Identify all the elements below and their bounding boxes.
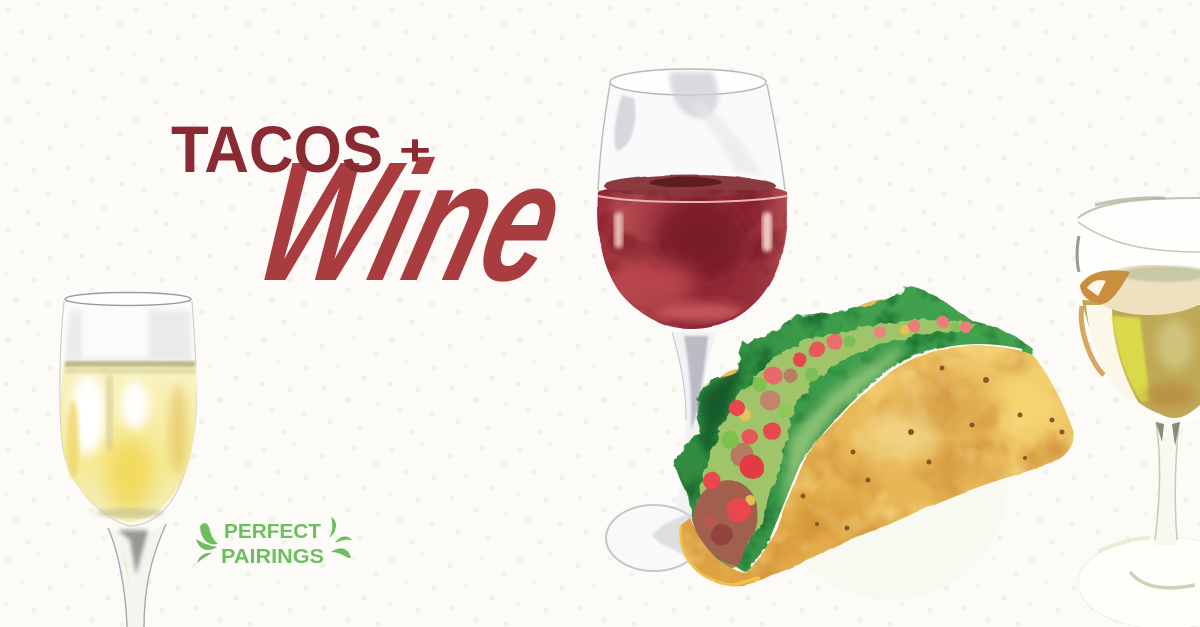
wine shading — [596, 190, 790, 330]
white edge — [772, 346, 1022, 538]
illustration: taco — [660, 280, 1080, 590]
lettuce — [673, 285, 1033, 570]
green and yellow bits — [721, 322, 960, 505]
glass bowl — [597, 69, 788, 334]
tagline: Perfect Pairings: PAIRINGS — [221, 546, 324, 568]
lettuce shading — [676, 288, 1028, 568]
white glass foot — [1078, 537, 1200, 627]
shell shading — [675, 340, 1080, 590]
tagline: Perfect Pairings — [196, 517, 352, 568]
heading: TACOS: TACOS — [171, 112, 383, 186]
illustration: white wine glass — [1077, 198, 1200, 627]
tagline text: PERFECT — [224, 521, 321, 543]
pale green circle behind taco — [774, 380, 1006, 600]
flute bowl — [60, 292, 196, 526]
white wine — [1080, 265, 1200, 418]
heading: script Wine: Wine — [240, 126, 584, 316]
illustration: champagne flute — [60, 292, 197, 627]
illustration: red wine glass — [596, 69, 790, 571]
heading: plus sign: + — [399, 126, 431, 175]
wine — [598, 175, 787, 329]
stem — [662, 332, 716, 530]
salsa chunks — [703, 316, 972, 546]
taco shell — [675, 340, 1080, 590]
white glass bowl — [1077, 198, 1200, 424]
meat — [692, 346, 821, 570]
white glass stem — [1154, 420, 1180, 545]
flute stem — [106, 522, 168, 627]
left sparkle strokes — [196, 523, 218, 563]
title: Tacos + Wine — [171, 112, 584, 316]
back of shell — [715, 299, 905, 395]
champagne — [61, 361, 196, 522]
right sparkle strokes — [329, 517, 352, 558]
champagne shading — [106, 437, 154, 513]
foot — [606, 505, 702, 571]
filling — [692, 320, 977, 570]
